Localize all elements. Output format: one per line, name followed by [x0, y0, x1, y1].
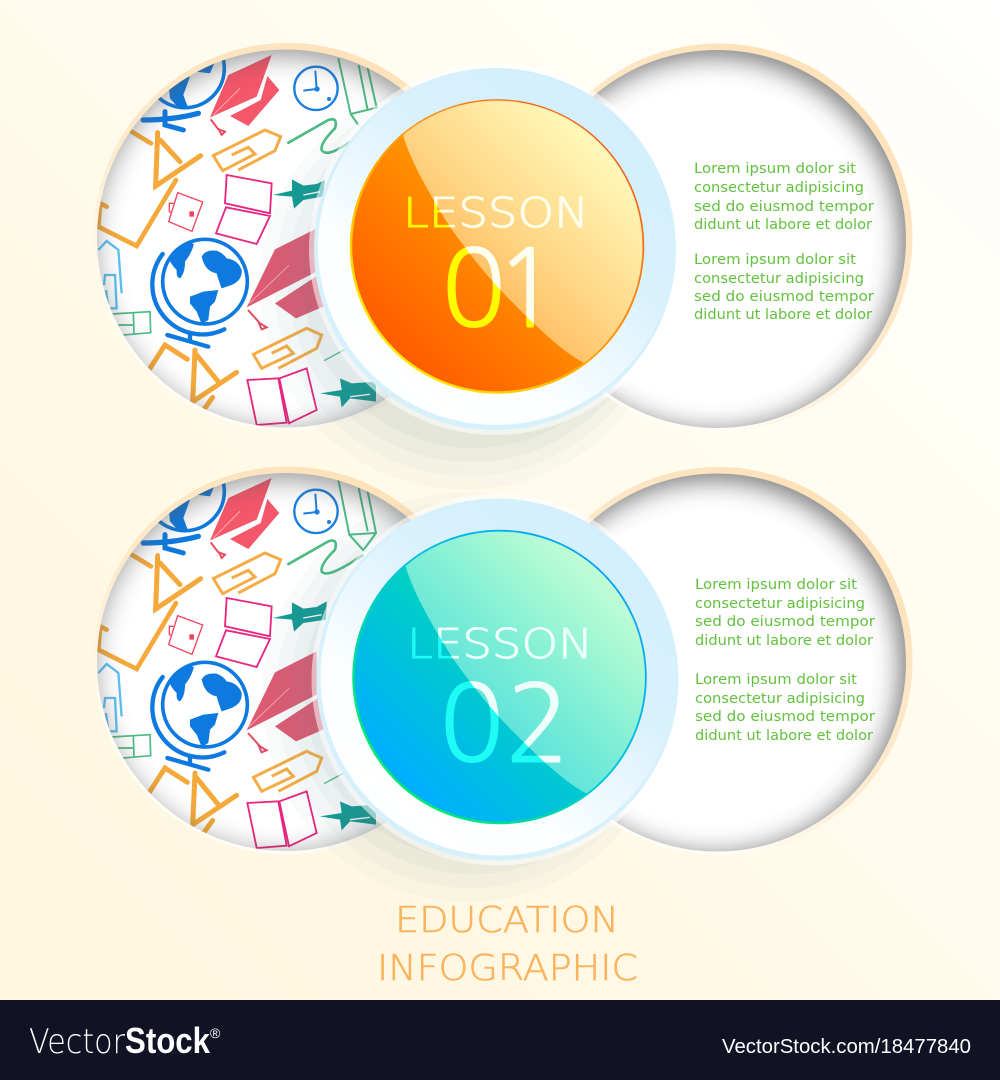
glossy highlight: [403, 101, 643, 363]
lesson number: 02: [439, 670, 570, 778]
row 2: lorem text block: [695, 577, 875, 744]
row 1: lorem text block: didunt ut labore et dolor: [694, 217, 872, 233]
icon: small globe: [140, 60, 226, 132]
row 2: lesson 02 medallion: 02: [439, 670, 570, 778]
lesson number: 01: [441, 235, 559, 343]
icon: orange set square: [98, 555, 176, 669]
row 2: lorem text block: sed do eiusmod tempor: [695, 709, 875, 725]
row 1: lorem text block: Lorem ipsum dolor sit: [694, 161, 857, 177]
lesson label: LESSON: [403, 189, 589, 237]
row 2: left circle with education icons: [95, 466, 418, 854]
row 2: lorem text block: sed do eiusmod tempor: [695, 614, 875, 630]
icon: briefcase: [169, 616, 203, 654]
icon: graduation cap: [210, 55, 279, 135]
icon: graduation cap: [210, 478, 279, 558]
lesson label: LESSON: [407, 620, 593, 668]
icon: pink open book lower: [247, 368, 317, 425]
row 1: right text circle: [588, 44, 912, 428]
icon: pink open book: [216, 175, 272, 244]
row 1: lesson 01 medallion: LESSON: [403, 189, 589, 237]
row 2: lorem text block: didunt ut labore et dolor: [695, 633, 873, 649]
row 2: lorem text block: consectetur adipisicing: [695, 596, 865, 612]
icon: green line: [324, 349, 345, 361]
icon: orange triangle lower: [149, 345, 237, 409]
footer banner: [0, 1000, 1000, 1080]
icon set: school supplies: [98, 452, 376, 848]
icon: green ruler box: [112, 312, 151, 335]
icon: large graduation cap: [247, 651, 323, 752]
footer logo: [29, 1020, 221, 1062]
icon: clock: [294, 67, 338, 110]
row 2: lorem text block: didunt ut labore et dolor: [695, 728, 873, 744]
row 1: left circle with education icons: [95, 43, 412, 431]
icon: pink open book lower: [247, 791, 317, 848]
icon: orange paper clip lower: [253, 328, 322, 368]
icon: green line: [324, 772, 345, 784]
icon: orange triangle: [156, 556, 201, 609]
row 2 medallion shadow: [262, 492, 672, 902]
icon: large graduation cap: [247, 228, 323, 329]
row 2: right text circle: [508, 462, 918, 872]
footer logo: Stock: [125, 1020, 211, 1061]
icon: green squiggle clip: [287, 119, 350, 153]
icon: large globe: [152, 662, 247, 770]
row 1: lorem text block: sed do eiusmod tempor: [694, 289, 874, 305]
glossy highlight: [406, 532, 645, 794]
footer logo: ®: [210, 1025, 221, 1041]
title: INFOGRAPHIC: [377, 948, 638, 989]
row 1: lorem text block: [694, 161, 874, 323]
footer logo: Vector: [29, 1022, 125, 1062]
icon: briefcase: [169, 193, 203, 231]
row 2: lorem text block: Lorem ipsum dolor sit: [695, 577, 858, 593]
icon: small globe: [140, 483, 226, 556]
icon: orange paper clip: [213, 130, 281, 171]
icon: orange triangle lower: [149, 768, 237, 832]
icon: large globe: [152, 239, 247, 347]
icon: teal push pin: [273, 601, 327, 632]
icon: pink open book: [216, 598, 272, 667]
icon: green ruler box: [112, 735, 151, 758]
title: EDUCATION: [395, 900, 619, 941]
icon: orange triangle: [156, 133, 201, 186]
row 1: lorem text block: didunt ut labore et dolor: [694, 307, 872, 323]
row 1: lorem text block: sed do eiusmod tempor: [694, 199, 874, 215]
icon: blue paper clip: [98, 664, 122, 731]
icon: orange paper clip: [213, 553, 281, 594]
icon: teal push pin lower: [320, 378, 376, 407]
row 2: lorem text block: consectetur adipisicing: [695, 691, 865, 707]
footer url: VectorStock.com/18477840: [722, 1035, 971, 1058]
icon: green pencil: [338, 480, 376, 550]
icon: orange paper clip lower: [253, 751, 322, 791]
icon: teal push pin lower: [320, 801, 376, 830]
icon: orange set square: [98, 132, 176, 246]
icon: green squiggle clip: [287, 541, 363, 573]
row 1: lorem text block: consectetur adipisicing: [694, 180, 864, 196]
row 2: lesson 02 medallion: [312, 494, 684, 866]
row 1: lorem text block: Lorem ipsum dolor sit: [694, 252, 857, 268]
row 1 medallion shadow: [260, 80, 670, 490]
title: [377, 900, 638, 989]
icon: clock: [294, 490, 338, 533]
icon: green pencil: [338, 58, 377, 125]
row 2: lesson 02 medallion: LESSON: [407, 620, 593, 668]
icon set: school supplies: [98, 29, 377, 425]
row 1: lesson 01 medallion: 01: [441, 235, 559, 343]
row 1: lorem text block: consectetur adipisicing: [694, 271, 864, 287]
row 1: lesson 01 medallion: [309, 63, 681, 435]
icon: blue paper clip: [98, 241, 122, 308]
icon: teal push pin: [273, 179, 325, 209]
row 2: lorem text block: Lorem ipsum dolor sit: [695, 672, 858, 688]
